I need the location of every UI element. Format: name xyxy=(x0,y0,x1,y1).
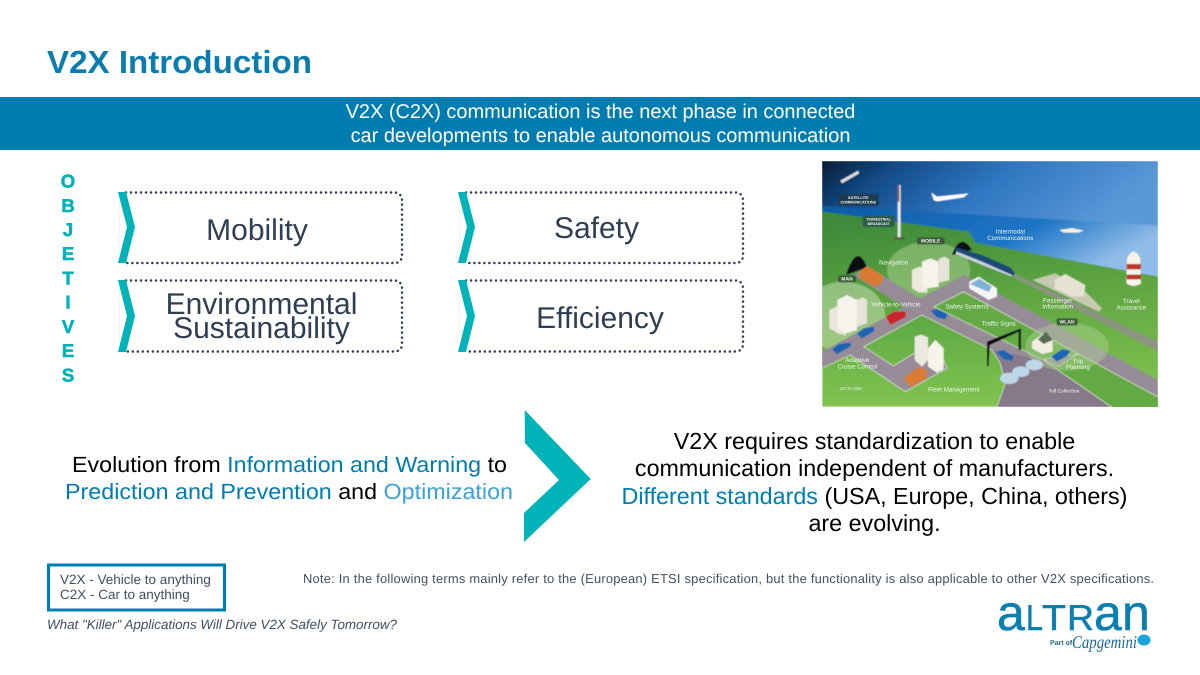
footer source line: What "Killer" Applications Will Drive V2X Safely Tomorrow? xyxy=(47,617,398,632)
illustration: V2X connected road scene: ©ETSI 2006 xyxy=(840,386,862,391)
illustration: V2X connected road scene: Intermodal xyxy=(996,228,1025,235)
illustration: V2X connected road scene: Trip xyxy=(1073,357,1083,364)
illustration: V2X connected road scene: Planning xyxy=(1066,363,1090,370)
logo: Altran part of Capgemini xyxy=(997,585,1150,652)
vertical heading: objectives: I xyxy=(65,292,71,312)
left statement: evolution: Prediction and Prevention and Optimization xyxy=(65,479,513,504)
right statement: standardization xyxy=(622,428,1127,536)
logo: Altran part of Capgemini: n xyxy=(1122,585,1150,641)
vertical heading: objectives: V xyxy=(62,316,75,337)
panel: environmental sustainability xyxy=(118,280,402,352)
illustration: V2X connected road scene: WLAN xyxy=(1059,319,1074,325)
illustration: V2X connected road scene: Fleet Management xyxy=(928,386,980,393)
vertical heading: objectives: J xyxy=(63,219,73,240)
vertical heading: objectives: E xyxy=(62,340,74,361)
logo: Altran part of Capgemini: Part of xyxy=(1050,639,1073,647)
vertical heading: objectives: E xyxy=(62,243,74,264)
right statement: standardization: are evolving. xyxy=(808,510,941,536)
illustration: V2X connected road scene: Assistance xyxy=(1116,304,1146,311)
illustration: V2X connected road scene: Vehicle-to-Vehicle xyxy=(871,301,921,308)
banner: V2X (C2X) communication is the next phase in connected xyxy=(346,101,855,123)
vertical heading: objectives xyxy=(61,170,75,386)
panel: environmental sustainability: Sustainability xyxy=(173,312,350,345)
logo: Altran part of Capgemini: T xyxy=(1042,597,1066,638)
illustration: V2X connected road scene: Toll Collection xyxy=(1049,388,1079,394)
logo: Altran part of Capgemini: R xyxy=(1067,597,1094,638)
illustration: V2X connected road scene: Safety Systems xyxy=(946,303,988,310)
note: Note: In the following terms mainly refer to the (European) ETSI specification, but the functionality is also applicable to other V2X specifications. xyxy=(303,571,1154,586)
illustration: V2X connected road scene: Passenger xyxy=(1043,297,1072,304)
illustration: V2X connected road scene: TERRESTRIAL xyxy=(866,217,891,221)
panel: efficiency xyxy=(458,280,743,352)
illustration: V2X connected road scene: Adaptive xyxy=(845,356,869,363)
illustration: V2X connected road scene: Traffic Signs xyxy=(982,320,1016,327)
logo: Altran part of Capgemini: Capgemini xyxy=(1072,632,1137,652)
logo: Altran part of Capgemini: L xyxy=(1026,597,1043,638)
legend box: abbreviations: V2X - Vehicle to anything xyxy=(60,572,211,587)
logo: Altran part of Capgemini: a xyxy=(1094,585,1122,641)
illustration: V2X connected road scene: Travel xyxy=(1123,297,1140,304)
vertical heading: objectives: T xyxy=(62,268,74,288)
panel: efficiency: Efficiency xyxy=(536,302,664,335)
banner xyxy=(0,97,1200,150)
illustration: V2X connected road scene: Information xyxy=(1042,303,1073,310)
panel: mobility xyxy=(118,192,402,263)
title: V2X Introduction xyxy=(47,44,312,80)
illustration: V2X connected road scene: MAN xyxy=(841,276,853,282)
left statement: evolution: Evolution from Information and Warning to xyxy=(72,452,507,477)
right statement: standardization: V2X requires standardization to enable xyxy=(674,428,1075,454)
legend box: abbreviations: C2X - Car to anything xyxy=(60,587,190,602)
panel: environmental sustainability: Environmental xyxy=(166,288,357,321)
arrow: large chevron xyxy=(524,410,591,542)
vertical heading: objectives: B xyxy=(61,195,75,216)
logo: Altran part of Capgemini: a xyxy=(997,585,1025,641)
illustration: V2X connected road scene: Navigation xyxy=(879,259,908,266)
panel: safety xyxy=(458,192,743,263)
legend box: abbreviations xyxy=(48,565,224,610)
illustration: V2X connected road scene xyxy=(802,161,1159,408)
illustration: V2X connected road scene: COMMUNICATIONS xyxy=(840,200,876,204)
illustration: V2X connected road scene: MOBILE xyxy=(921,238,940,244)
vertical heading: objectives: S xyxy=(62,364,74,386)
banner: car developments to enable autonomous communication xyxy=(351,125,850,147)
panel: safety: Safety xyxy=(554,212,639,245)
right statement: standardization: communication independent of manufacturers. xyxy=(635,455,1114,481)
illustration: V2X connected road scene: BROADCAST xyxy=(867,222,890,226)
illustration: V2X connected road scene: Cruise Control xyxy=(838,363,877,370)
right statement: standardization: Different standards (USA, Europe, China, others) xyxy=(622,483,1127,509)
illustration: V2X connected road scene: Communications xyxy=(987,234,1033,241)
panel: mobility: Mobility xyxy=(206,214,308,247)
vertical heading: objectives: O xyxy=(61,170,75,192)
illustration: V2X connected road scene: SATELLITE xyxy=(848,196,869,200)
left statement: evolution xyxy=(65,452,513,504)
